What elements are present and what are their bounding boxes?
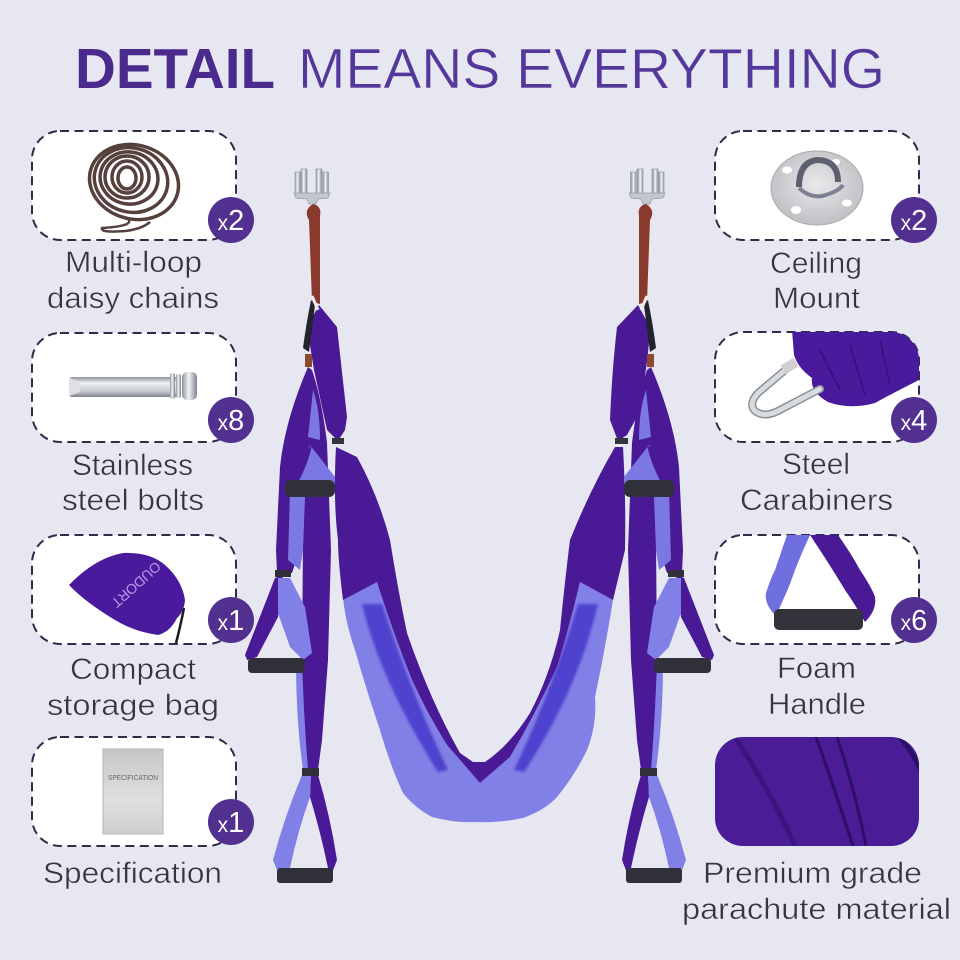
- icon: ceiling mount plate: [771, 151, 863, 225]
- badge: x4: [891, 397, 937, 443]
- lower loop dark: [310, 775, 337, 873]
- badge: x2: [208, 197, 254, 243]
- badge: x2: x2: [218, 205, 244, 237]
- label: ceiling mount: Ceiling: [770, 247, 862, 280]
- badge: x1: [208, 799, 254, 845]
- badge: x1: x1: [218, 807, 244, 839]
- label: steel carabiners: [740, 448, 893, 517]
- badge: x2: x2: [901, 205, 927, 237]
- panel: compact storage bag: [32, 535, 254, 644]
- badge: x8: x8: [218, 405, 244, 437]
- purple drape: [335, 447, 625, 783]
- middle strap dark: [245, 575, 283, 660]
- shoulder sleeve left: [307, 305, 347, 441]
- badge: x1: x1: [218, 605, 244, 637]
- label: steel carabiners: Carabiners: [740, 484, 893, 517]
- label: stainless steel bolts: [62, 449, 204, 517]
- shoulder sleeve right: [610, 305, 650, 441]
- lower tie: [302, 768, 319, 776]
- lower loop light: [273, 775, 311, 870]
- left side strap assembly: [245, 169, 337, 883]
- icon: steel bolt: [69, 372, 197, 400]
- right side strap assembly: [622, 169, 714, 883]
- panel: ceiling mount: [715, 131, 937, 243]
- panel: parachute material swatch: [715, 737, 925, 846]
- badge: x6: [891, 597, 937, 643]
- red rope: [307, 204, 320, 304]
- label: parachute material: parachute material: [682, 893, 951, 926]
- icon: foam handle loop: [766, 535, 875, 630]
- label: ceiling mount: Mount: [773, 282, 861, 315]
- sleeve ties: [332, 438, 628, 444]
- light inner strip: [288, 390, 335, 570]
- badge: x2: [891, 197, 937, 243]
- label: ceiling mount: [770, 247, 862, 315]
- icon: storage bag: OUDORT: [108, 559, 164, 611]
- label: foam handle: Handle: [768, 688, 866, 721]
- label: compact storage bag: Compact: [70, 653, 197, 686]
- title: DETAIL: [75, 37, 275, 101]
- panel: stainless steel bolts: [32, 333, 254, 443]
- badge: x4: x4: [901, 405, 927, 437]
- label: multi-loop daisy chains: daisy chains: [47, 282, 219, 315]
- label: stainless steel bolts: Stainless: [72, 449, 193, 482]
- icon: storage bag: [69, 553, 185, 643]
- panel: specification: [32, 737, 254, 846]
- black strap and carabiner: [303, 300, 315, 352]
- panel: foam handle: [715, 535, 937, 644]
- tie: [275, 570, 291, 577]
- deep blue folds: [362, 604, 598, 772]
- lower light stripe: [296, 660, 312, 770]
- icon: specification booklet: [103, 749, 163, 834]
- label: steel carabiners: Steel: [782, 448, 850, 481]
- label: multi-loop daisy chains: [47, 246, 219, 315]
- label: specification: Specification: [43, 857, 222, 890]
- label: parachute material: [682, 857, 951, 926]
- middle sleeve light: [278, 578, 312, 660]
- hammock: central seat: [307, 305, 650, 822]
- badge: x6: x6: [901, 605, 927, 637]
- column panel: [276, 367, 331, 770]
- label: multi-loop daisy chains: Multi-loop: [65, 246, 202, 279]
- badge: x1: [208, 597, 254, 643]
- middle handle: [248, 658, 305, 673]
- label: foam handle: [768, 652, 866, 721]
- label: compact storage bag: [47, 653, 219, 722]
- label: compact storage bag: storage bag: [47, 689, 219, 722]
- label: parachute material: Premium grade: [703, 857, 922, 890]
- label: foam handle: Foam: [777, 652, 856, 685]
- panel: steel carabiners: [715, 330, 937, 443]
- panel: multi-loop daisy chains: [32, 131, 254, 243]
- label: stainless steel bolts: steel bolts: [62, 484, 204, 517]
- badge: x8: [208, 397, 254, 443]
- icon: daisy chain coil: [81, 135, 187, 232]
- lower handle: [277, 868, 333, 883]
- title: MEANS EVERYTHING: [298, 37, 885, 101]
- icon: specification booklet: SPECIFICATION: [108, 773, 158, 782]
- ceiling bolts: [294, 169, 330, 204]
- light seat fabric: [343, 582, 613, 822]
- top handle: [285, 480, 335, 497]
- icon: carabiner with fabric: [752, 330, 925, 414]
